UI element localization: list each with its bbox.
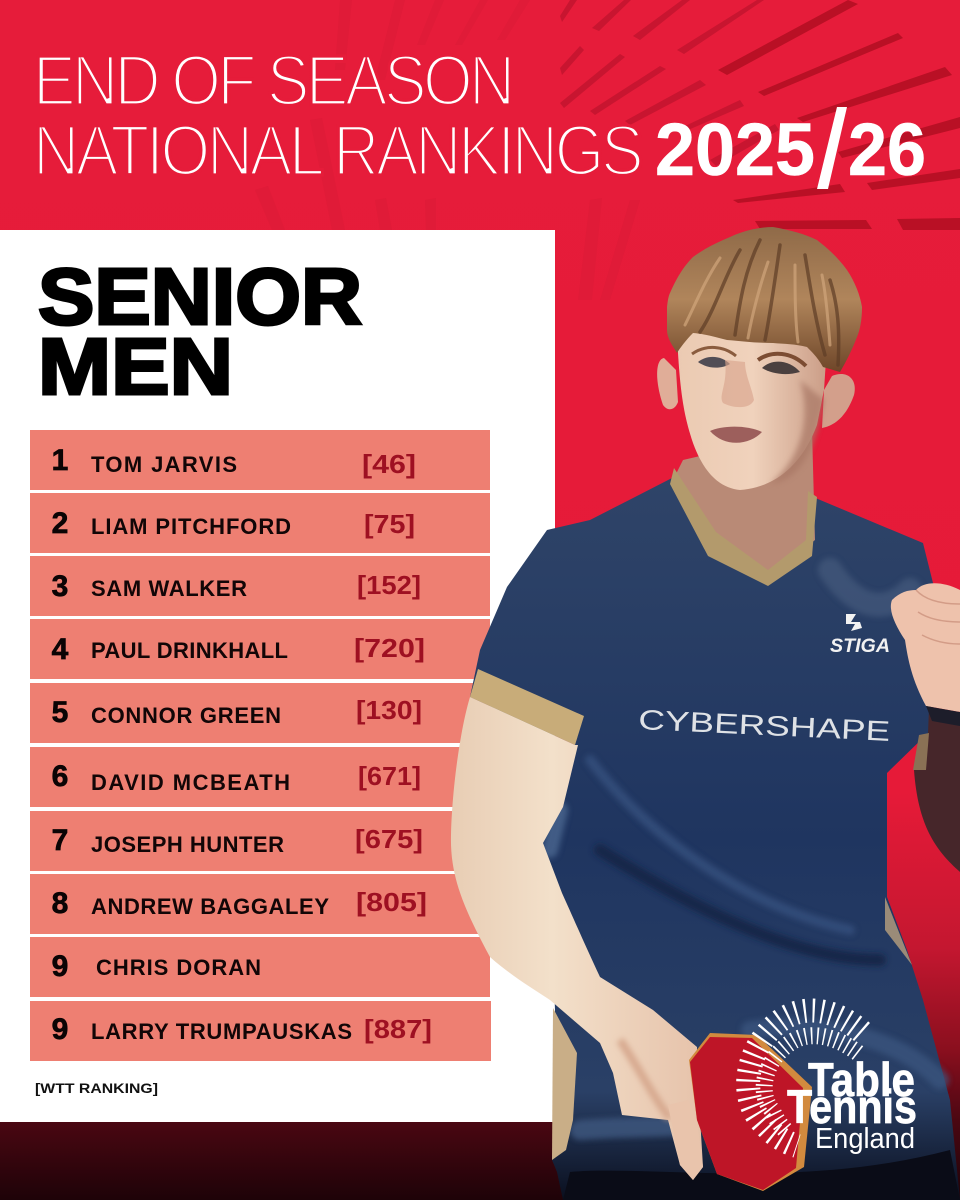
- nose: [722, 360, 754, 407]
- logo wordmark: England: [815, 1123, 915, 1155]
- ears: [657, 358, 678, 409]
- heading: senior men: [38, 252, 362, 411]
- chest sponsor: stiga: [830, 614, 890, 657]
- raised arm with hand: [451, 697, 703, 1180]
- row 1: TOM JARVIS: [91, 452, 237, 477]
- row 7: [675]: [355, 824, 423, 854]
- title: [33, 42, 815, 191]
- player photo illustration: [451, 227, 960, 1200]
- shirt folds: [550, 570, 940, 1130]
- row 10: 9: [52, 1013, 68, 1046]
- sunburst rays: [255, 0, 960, 300]
- row 3: [152]: [357, 570, 421, 600]
- arm shading: [620, 1040, 670, 1118]
- logo: table tennis england: [748, 1011, 917, 1155]
- mouth: [710, 427, 762, 443]
- row 2: [75]: [364, 509, 415, 539]
- collar: [670, 468, 817, 586]
- row 5: [130]: [356, 695, 422, 725]
- year slash: [817, 107, 847, 189]
- shirt: [470, 478, 960, 1200]
- season year: 2025: [655, 108, 815, 191]
- row 6: DAVID MCBEATH: [91, 770, 290, 795]
- heading: senior men: SENIOR: [38, 252, 362, 341]
- eyes: [692, 347, 806, 374]
- row 7: [30, 811, 490, 871]
- row 3: SAM WALKER: [91, 576, 247, 601]
- row 2: LIAM PITCHFORD: [91, 514, 291, 539]
- wristband: [926, 706, 960, 726]
- row 7: 7: [52, 824, 68, 857]
- row 4: 4: [52, 633, 69, 666]
- row 8: 8: [52, 887, 68, 920]
- row 9: [30, 937, 490, 997]
- chest sponsor: stiga: STIGA: [830, 636, 890, 657]
- row 5: 5: [52, 696, 68, 729]
- row 7: JOSEPH HUNTER: [91, 832, 284, 857]
- row 3: 3: [52, 570, 68, 603]
- footnote: [WTT RANKING]: [35, 1081, 158, 1096]
- side panel right: [885, 897, 912, 965]
- row 6: 6: [52, 760, 68, 793]
- panel: white rankings card: [0, 230, 555, 1122]
- row 9: 9: [52, 950, 68, 983]
- face: [676, 300, 830, 490]
- row 1: 1: [52, 444, 68, 477]
- title line 2: NATIONAL RANKINGS: [33, 112, 641, 191]
- waistband: [563, 1150, 960, 1200]
- row 9: CHRIS DORAN: [96, 955, 261, 980]
- row 10: [887]: [364, 1014, 432, 1044]
- hair: [667, 227, 862, 372]
- row 10: LARRY TRUMPAUSKAS: [91, 1019, 352, 1044]
- row 1: [30, 430, 490, 490]
- row 1: [46]: [362, 449, 416, 479]
- row 8: [30, 874, 490, 934]
- neck: [672, 430, 815, 578]
- hair strands: [685, 240, 839, 365]
- row 8: ANDREW BAGGALEY: [91, 894, 329, 919]
- row 3: [30, 556, 490, 616]
- pointing finger: [668, 1100, 703, 1180]
- row 4: [720]: [354, 633, 425, 663]
- logo wordmark: [787, 1053, 917, 1155]
- row 2: 2: [52, 507, 68, 540]
- row 2: [30, 493, 490, 553]
- row 8: [805]: [356, 887, 427, 917]
- logo rays: [748, 1011, 862, 1146]
- row 10: [30, 1001, 491, 1061]
- fist: [891, 583, 960, 712]
- row 6: [671]: [358, 761, 421, 791]
- logo wordmark: Table: [808, 1053, 915, 1106]
- row 5: [30, 683, 490, 743]
- rankings table: [30, 430, 491, 1061]
- year suffix: 26: [848, 108, 926, 191]
- right forearm: [914, 705, 960, 872]
- sleeve cuff: [470, 669, 584, 745]
- chest sponsor: cybershape: CYBERSHAPE: [638, 704, 891, 747]
- row 4: PAUL DRINKHALL: [91, 638, 288, 663]
- logo wordmark: Tennis: [787, 1080, 917, 1133]
- heading: senior men: MEN: [38, 322, 233, 411]
- face shadow: [770, 380, 824, 484]
- row 4: [30, 619, 490, 679]
- row 5: CONNOR GREEN: [91, 703, 281, 728]
- table tennis paddle: [689, 1033, 812, 1191]
- right sleeve cuff: [913, 733, 929, 770]
- side panel left: [552, 1008, 577, 1160]
- row 6: [30, 747, 490, 807]
- title line 1: END OF SEASON: [33, 42, 512, 121]
